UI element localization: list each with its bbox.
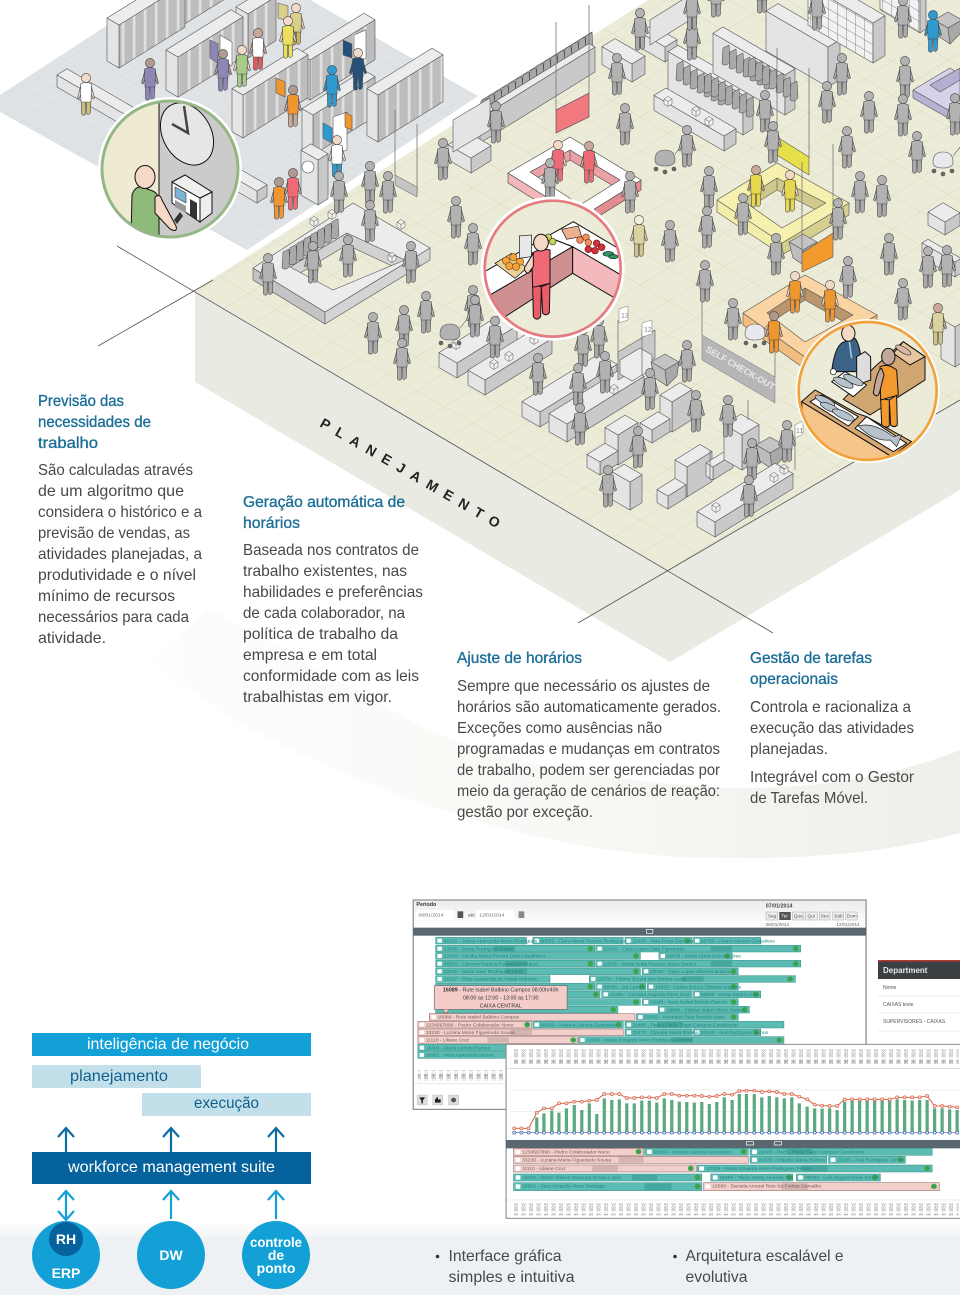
text block: Previsão das necessidades de trabalho: Previsão das — [38, 393, 124, 410]
red counter with sign — [508, 5, 641, 228]
screenshot: demand chart and shifts: 22400 - Pedro Paulo Tiago Campos Cavalcante — [759, 1149, 865, 1155]
screenshot: department panel: CAIXAS teste — [883, 1002, 914, 1008]
text block: Geração automática de horários: Geração automática de — [243, 494, 405, 511]
screenshot: schedule planner: 1234567890 - Pedro Colaborador Nono — [426, 1022, 514, 1028]
bar: planning: planejamento — [70, 1068, 168, 1085]
floor: store illustration base — [0, 0, 960, 662]
screenshot: schedule planner: 33230 - Luzana Maria Figueiredo Sousa — [426, 1030, 515, 1036]
gray service counter — [253, 203, 430, 324]
screenshot: demand chart and shifts: 11110 - Liliane Cruz — [522, 1166, 566, 1172]
bar: business intelligence: inteligência de negócio — [87, 1036, 249, 1053]
bullet: interface — [436, 1248, 575, 1286]
text block: Geração automática de horários — [243, 494, 423, 706]
screenshot: demand chart and shifts: 16089 - Daniela Amaral Reis Sá Freitas Carvalho — [712, 1184, 822, 1190]
text block: Previsão das necessidades de trabalho: previsão de vendas, as — [38, 525, 190, 542]
circle: DW: DW — [159, 1247, 183, 1263]
text block: Previsão das necessidades de trabalho: de um algoritmo que — [38, 483, 184, 500]
screenshot: demand chart and shifts: 20195 - Ana Rodrigues Lemos — [837, 1157, 905, 1163]
guide lines of the floor corners — [98, 246, 960, 633]
screenshot: schedule planner: 22010 - Cecília Maria Pereira Dias Cavalheiro — [444, 954, 545, 960]
screenshot: schedule planner: CAIXA CENTRAL — [480, 1003, 522, 1009]
screenshot: schedule planner: 22045 - Nara Isabel Batista Ramos — [649, 1000, 728, 1006]
orange counter with sign — [743, 144, 877, 369]
number flags 13 12 11: 13 — [621, 313, 629, 320]
bullet: interface: Interface gráfica — [448, 1248, 562, 1265]
bar: business intelligence — [32, 1033, 311, 1056]
screenshot: demand chart and shifts: 22045 - Maria Eduarda Alves Rodrigues Pereira — [706, 1166, 813, 1172]
screenshot: schedule planner: Qua — [794, 914, 803, 919]
text block: Ajuste de horários: de trabalho, podem ser gerenciadas por — [457, 762, 721, 779]
circle: ERP with RH: ERP — [52, 1265, 80, 1281]
screenshot: schedule planner: 06/01/2014 — [766, 922, 789, 927]
text block: Gestão de tarefas operacionais: Gestão de tarefas — [750, 650, 872, 667]
screenshot: demand chart and shifts: 33230 - Luzana Maria Figueiredo Sousa — [522, 1157, 612, 1163]
screenshot: demand chart and shifts: 22470 - Claudia Maria Ramos — [759, 1157, 825, 1163]
text block: Geração automática de horários: trabalho existentes, nas — [243, 563, 407, 580]
screenshot: schedule planner: 98795 - Alvaro Santos Gonçalves — [701, 938, 775, 944]
screenshot: department panel: Nome — [883, 985, 897, 991]
screenshot: demand chart and shifts: 18494 - Marta Helena Marques Sousa Lopes — [522, 1175, 622, 1181]
text block: Gestão de tarefas operacionais: operacionais — [750, 671, 838, 688]
PLANEJAMENTO vertical label: PLANEJAMENTO — [318, 415, 503, 531]
screenshot: schedule planner: 12/01/2014 — [836, 922, 860, 927]
screenshot: schedule planner: 23045 - Maria Rodrigues Costa — [444, 946, 513, 952]
text block: Geração automática de horários: de cada colaborador, na — [243, 605, 405, 622]
text block: Ajuste de horários: gestão por exceção. — [457, 804, 593, 821]
screenshot: schedule planner: Sáb — [834, 914, 843, 919]
screenshot: demand chart and shifts: 26902 - Sara Amanda Alves Santiago — [522, 1184, 605, 1190]
number flags 13 12 11: 12 — [644, 327, 652, 334]
screenshot: schedule planner: Dom — [847, 914, 857, 919]
text block: Previsão das necessidades de trabalho: necessidades de — [38, 414, 151, 431]
arrows up from suite — [58, 1128, 284, 1152]
circle: controle de ponto — [242, 1221, 310, 1289]
diagram: workforce management layers — [32, 1033, 311, 1289]
text block: Gestão de tarefas operacionais: execução das atividades — [750, 720, 914, 737]
storage room lockers — [57, 0, 443, 205]
screenshot: schedule planner: 26187 - Elisa Aparecida de Paula Antunes — [444, 977, 537, 983]
text block: Gestão de tarefas operacionais: Controla e racionaliza a — [750, 699, 911, 716]
yellow counter with sign — [717, 48, 849, 266]
checkout counters — [439, 315, 795, 537]
screenshot: schedule planner: 18205 - Maria Sofia Pessoa Jesus Santos — [604, 961, 697, 967]
circle: controle de ponto: ponto — [257, 1260, 295, 1276]
self check-out sign — [702, 270, 777, 403]
text block: Geração automática de horários: Baseada nos contratos de — [243, 542, 419, 559]
screenshot: schedule planner: 22470 - Claudia Maria Ramos — [632, 1030, 699, 1036]
circle: controle de ponto: de — [268, 1247, 284, 1263]
text block: Geração automática de horários: horários — [243, 515, 300, 532]
strollers — [439, 144, 960, 348]
bullet: architecture: Arquitetura escalável e — [686, 1248, 844, 1265]
text block: Gestão de tarefas operacionais: de Tarefas Móvel. — [750, 790, 868, 807]
screenshot: schedule planner: 18045 - Fátima Isabel Alves Santos — [666, 1007, 746, 1013]
number flags 13 12 11: 11 — [796, 428, 803, 435]
screenshot: schedule planner — [413, 900, 866, 1109]
bullet: architecture: evolutiva — [686, 1269, 748, 1286]
screenshot: schedule planner: 98581 - Cármen Patricia Fernandes Matos — [444, 961, 539, 967]
bar: execution — [142, 1093, 311, 1116]
screenshot: demand chart and shifts: 18494 - Tânia Santa Almeida Tito — [719, 1175, 793, 1181]
bar: execution: execução — [194, 1095, 259, 1112]
screenshot: department panel: Department — [883, 966, 928, 975]
screenshot: schedule planner: 98092 - Clara Maria Pereira Rodrigues — [540, 938, 627, 944]
text block: Geração automática de horários: conformidade com as leis — [243, 668, 419, 685]
screenshot: schedule planner: 20645 - Maria José Rodrigues Lima — [444, 969, 523, 975]
bottom gray band — [0, 1222, 960, 1295]
screenshot: schedule planner: 98081 - Isa Lemos — [604, 984, 646, 990]
text block: Previsão das necessidades de trabalho: produtividade e o nível — [38, 567, 196, 584]
text block: Gestão de tarefas operacionais: planejadas. — [750, 741, 828, 758]
magnifier circle: time clock — [98, 93, 242, 241]
screenshot: demand chart and shifts: 1234567890 - Pedro Colaborador Nono — [522, 1149, 610, 1155]
store people: customers and staff — [78, 0, 960, 517]
text block: Previsão das necessidades de trabalho: trabalho — [38, 435, 98, 452]
text block: Previsão das necessidades de trabalho: necessários para cada — [38, 609, 189, 626]
text block: Geração automática de horários: trabalhistas em vigor. — [243, 689, 392, 706]
screenshot: schedule planner: 98098 - Rosa Santos Dias — [701, 992, 760, 998]
security gate — [395, 110, 417, 197]
screenshot: schedule planner: 22045 - Tiago Lopes Oliveira Branco — [649, 969, 731, 975]
circle: ERP with RH: RH — [56, 1231, 76, 1247]
circle: controle de ponto: controle — [250, 1234, 302, 1250]
screenshot: demand chart and shifts: 98280 - Andreia Santos Gonçalves — [654, 1149, 731, 1155]
screenshot: department panel — [878, 960, 960, 1044]
screenshot: schedule planner: 22020 - Henrique Dias Pereira Assis — [644, 1015, 725, 1021]
text block: Ajuste de horários: horários são automaticamente gerados. — [457, 699, 721, 716]
screenshot: schedule planner: 06/01/2014 — [419, 913, 444, 919]
text block: Ajuste de horários: Sempre que necessário os ajustes de — [457, 678, 710, 695]
screenshot: schedule planner: 20200 - Carla Lopes Dias Figueiredo — [604, 946, 685, 952]
self check-out sign: SELF CHECK-OUT — [704, 344, 777, 392]
bars: staffing — [537, 1094, 957, 1133]
screenshot: schedule planner: 98280 - Andreia Santos Gonçalves — [540, 1022, 618, 1028]
text block: Gestão de tarefas operacionais: Integrável com o Gestor — [750, 769, 915, 786]
screenshot: schedule planner: 98201 - Joana Aparecida Maria Rodrigues — [444, 938, 538, 944]
screenshot: schedule planner: Período — [416, 902, 436, 908]
screenshot: schedule planner: 20195 - Ana Rodrigues Lemos — [701, 1030, 769, 1036]
text block: Gestão de tarefas operacionais — [750, 650, 915, 807]
screenshot: schedule planner: 16089 - Rute Isabel Balbino Campos — [437, 1015, 520, 1021]
screenshot: schedule planner: Qui — [807, 914, 815, 919]
screenshot: schedule planner: 11110 - Liliane Cruz — [426, 1038, 470, 1044]
text block: Previsão das necessidades de trabalho: atividades planejadas, a — [38, 546, 202, 563]
magnifier circle: produce counter — [480, 197, 627, 341]
circle: ERP with RH — [32, 1221, 100, 1289]
screenshot: schedule planner: 22045 - Maria Eduarda Alves Rodrigues Pereira — [586, 1038, 693, 1044]
bar: workforce management suite — [32, 1152, 311, 1184]
clothing racks and counters — [448, 0, 960, 367]
text block: Geração automática de horários: empresa e em total — [243, 647, 377, 664]
screenshot: schedule planner: Ter — [781, 914, 788, 919]
text block: Ajuste de horários — [457, 650, 721, 821]
text block: Ajuste de horários: Ajuste de horários — [457, 650, 582, 667]
screenshot: demand chart and shifts: 98094 - Luís Miguel Maria Santos — [805, 1175, 880, 1181]
text block: Ajuste de horários: Exceções como ausências não — [457, 720, 662, 737]
text block: Previsão das necessidades de trabalho: considera o histórico e a — [38, 504, 202, 521]
screenshot: schedule planner: 22400 - Pedro Paulo Tiago Campos Cavalcante — [632, 1022, 738, 1028]
screenshot: schedule planner: 18078 - Maria Clara Ferreira Dias — [666, 954, 741, 960]
bar: workforce management suite: workforce management suite — [67, 1159, 275, 1176]
text block: Ajuste de horários: programadas e mudanças em contratos — [457, 741, 720, 758]
screenshot: schedule planner: 26902 - Vera Aparecida Nunes — [426, 1053, 494, 1059]
screenshot: schedule planner: Seg — [768, 914, 777, 919]
bar: planning — [32, 1065, 201, 1088]
screenshot: schedule planner: 22400 - Mira Prata Santana — [632, 938, 694, 944]
text block: Previsão das necessidades de trabalho: São calculadas através — [38, 462, 193, 479]
screenshot: demand chart and shifts — [506, 1044, 960, 1218]
screenshot: schedule planner: 08:00 as 12:00 - 13:00 as 17:00 — [463, 995, 539, 1001]
text block: Previsão das necessidades de trabalho — [38, 393, 202, 647]
screenshot: schedule planner: 18494 - Maria Lemos Ramos — [426, 1045, 491, 1051]
text block: Previsão das necessidades de trabalho: atividade. — [38, 630, 106, 647]
screenshot: schedule planner: 07/01/2014 — [766, 904, 793, 910]
arrows from sources — [58, 1191, 284, 1220]
screenshot: schedule planner: 16089 - Rute Isabel Balbino Campos 08:00h/40h — [443, 988, 559, 994]
screenshot: department panel: SUPERVISORES - CAIXAS — [883, 1019, 946, 1025]
screenshot: schedule planner: Sex — [821, 914, 829, 919]
text block: Geração automática de horários: habilidades e preferências — [243, 584, 423, 601]
bullet: interface: simples e intuitiva — [448, 1269, 575, 1286]
bullet: architecture — [673, 1248, 844, 1286]
circle: DW — [137, 1221, 205, 1289]
text block: Ajuste de horários: meio da geração de cenários de reação: — [457, 783, 720, 800]
screenshot: schedule planner: 22295 - Carolina Augusta Pires Dias — [609, 992, 690, 998]
background swoosh — [153, 607, 960, 858]
text block: Geração automática de horários: política de trabalho da — [243, 626, 398, 643]
text block: Previsão das necessidades de trabalho: mínimo de recursos — [38, 588, 175, 605]
screenshot: schedule planner: 22070 - Fátima Sousa dos Santos Assis — [597, 977, 686, 983]
screenshot: schedule planner: 14808 - Carlos Souza Oliveira Antunes — [655, 984, 742, 990]
number flags 13 12 11 — [619, 306, 803, 438]
magnifier circle: fish counter — [793, 317, 943, 470]
screenshot: schedule planner: 12/01/2014 — [479, 913, 505, 919]
screenshot: schedule planner: até — [468, 913, 475, 919]
